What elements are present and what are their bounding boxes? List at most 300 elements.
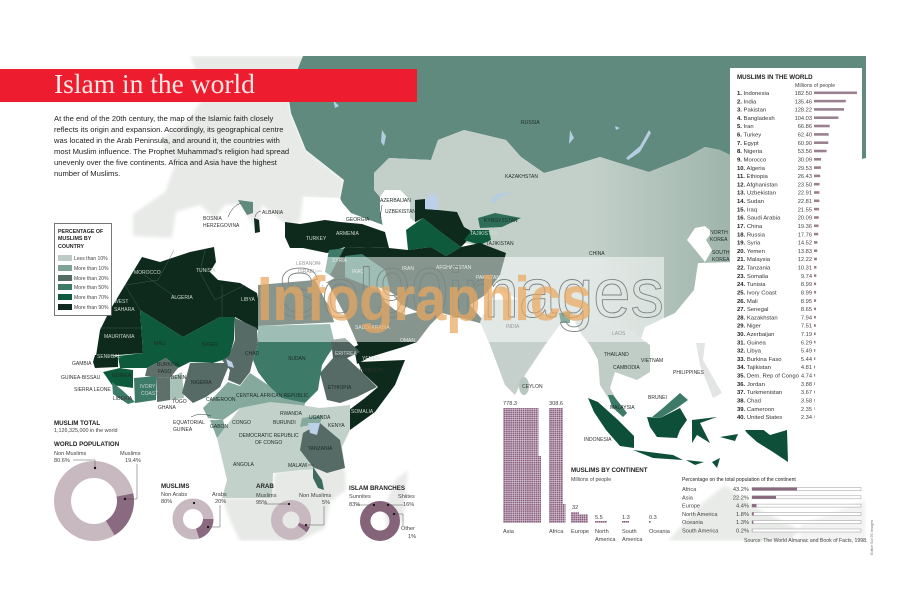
ranked country names: 14. Sudan [737, 199, 764, 205]
map country labels: KOREA [710, 237, 728, 243]
intro text: reflects its origin and expansion. Accordingly, its geographical centre [54, 125, 283, 134]
map country labels: IRAN [402, 266, 414, 272]
map country labels: UGANDA [309, 415, 331, 421]
countries: turkmenistan [406, 218, 461, 256]
values in millions: 104.03 [795, 116, 812, 122]
legend: percentage of muslims by country: PERCENTAGE OF [58, 229, 104, 235]
intro text: most Muslim influence. The Prophet Muhammad's religion had spread [54, 147, 289, 156]
countries: maghreb and mauritania [96, 247, 262, 356]
map country labels: RWANDA [280, 411, 303, 417]
map country labels: KOREA [712, 257, 730, 263]
legend: percentage of muslims by country: MUSLIMS BY [58, 236, 92, 242]
ranked country names: 1. Indonesia [737, 91, 770, 97]
ranked country names: 37. Turkmenistan [737, 390, 782, 396]
ranked country names: 12. Afghanistan [737, 182, 778, 188]
intro text: number of Muslims. [54, 169, 120, 178]
donut: muslims arab share: 20% [215, 499, 226, 505]
country: malawi [313, 467, 324, 490]
chart heading: MUSLIMS BY CONTINENT [571, 467, 648, 474]
country: lake victoria [308, 423, 320, 435]
ranked country names: 18. Russia [737, 232, 766, 238]
map country labels: ANGOLA [233, 462, 255, 468]
ranked country names: 3. Pakistan [737, 108, 766, 114]
values in millions: 3.58 [801, 398, 812, 404]
values in millions: 182.50 [795, 91, 812, 97]
donut: muslims arab share [161, 483, 227, 534]
map country labels: CONGO [232, 420, 251, 426]
donut: muslims arab share: MUSLIMS [161, 483, 190, 490]
countries: southeast asia mainland [575, 322, 650, 412]
ranked country names: 19. Syria [737, 241, 761, 247]
continent labels: South [622, 529, 637, 535]
map country labels: DJIBOUTI [360, 368, 383, 374]
muslim total: 1,126,325,000 in the world [54, 428, 118, 434]
countries: uzbekistan [415, 199, 473, 247]
ranked country names: 23. Somalia [737, 274, 769, 280]
map country labels: MALI [154, 341, 166, 347]
donut: muslims arab share: Arabs [212, 492, 227, 498]
rows: North America [682, 512, 718, 518]
values in millions: 53.56 [798, 149, 812, 155]
values in millions: 8.95 [801, 299, 812, 305]
donut: islam branches: Other [401, 526, 415, 532]
donut: arab muslims share: Non Muslims [299, 493, 332, 499]
legend labels: More than 50% [74, 285, 109, 291]
ranked country names: 15. Iraq [737, 207, 757, 213]
map country labels: SOUTH [712, 250, 730, 256]
ranked country names: 40. United States [737, 415, 782, 421]
continent labels: Asia [503, 529, 515, 535]
country: philippines [696, 343, 722, 398]
ranked country names: 24. Tunisia [737, 282, 766, 288]
values in millions: 3.67 [801, 390, 812, 396]
map country labels: NORTH [710, 230, 728, 236]
country: aral sea [425, 193, 438, 210]
map country labels: BENIN [171, 375, 187, 381]
ranked country names: 27. Senegal [737, 307, 768, 313]
map country labels: GUINEA-BISSAU [61, 375, 101, 381]
land: southern africa [222, 468, 346, 541]
muslim total [54, 420, 118, 434]
chart: percentage on the total population of the continent: Percentage on the total population of the continent [682, 477, 796, 483]
country: gabon [210, 420, 227, 438]
ranked country names: 6. Turkey [737, 133, 761, 139]
ranked country names: 38. Chad [737, 398, 761, 404]
map country labels: OF CONGO [255, 440, 282, 446]
map country labels: SAUDI ARABIA [355, 325, 390, 331]
ranked country names: 11. Ethiopia [737, 174, 769, 180]
donut: world population: Non Muslims [54, 451, 87, 457]
ranked country names: 2. India [737, 99, 757, 105]
values in millions: 19.36 [798, 224, 812, 230]
map country labels: CEYLON [522, 384, 543, 390]
map country labels: BOSNIA [203, 216, 223, 222]
chart: muslims by continent dot bars [503, 401, 671, 543]
country: chad [222, 318, 258, 385]
intro text: unevenly over the five continents. Africa and Asia have the highest [54, 158, 278, 167]
values in millions: 7.94 [801, 315, 812, 321]
map country labels: NIGER [202, 342, 218, 348]
ranked country names: 32. Libya [737, 349, 762, 355]
rows: 1.8% [736, 512, 749, 518]
ranked country names: 31. Guinea [737, 340, 767, 346]
ranked country names: 4. Bangladesh [737, 116, 775, 122]
ranked country names: 28. Kazakhstan [737, 315, 778, 321]
donut: islam branches: Shiites [398, 494, 415, 500]
map country labels: TANZANIA [308, 446, 333, 452]
country: syria [325, 247, 356, 278]
donut: arab muslims share: 95% [256, 500, 267, 506]
values in millions: 23.50 [798, 182, 812, 188]
legend labels [74, 256, 109, 311]
intro text: was located in the Arab Peninsula, and around it, the countries with [53, 136, 280, 145]
values in millions: 4.74 [801, 374, 812, 380]
country: uganda [300, 415, 323, 427]
lake: balkhash [491, 192, 513, 204]
ranked country names: 9. Morocco [737, 158, 767, 164]
map country labels: UZBEKISTAN [385, 209, 416, 215]
map country labels: MALAYSIA [610, 405, 635, 411]
country: ghana [157, 377, 170, 402]
donut: arab muslims share [256, 483, 332, 538]
map country labels: PAKISTAN [476, 275, 500, 281]
country: turkey and caucasus [285, 220, 389, 253]
bar values: 778.3 [503, 401, 517, 407]
map country labels: MALAWI [288, 463, 308, 469]
bars [814, 92, 857, 418]
map country labels: CHAD [245, 351, 260, 357]
map country labels: EQUATORIAL [173, 420, 205, 426]
values in millions: 66.86 [798, 124, 812, 130]
map country labels: LEBANON [296, 261, 320, 267]
ranked country names: 17. China [737, 224, 763, 230]
ranked country names [737, 91, 800, 421]
values in millions: 128.22 [795, 108, 812, 114]
map country labels: AZERBAIJAN [380, 198, 411, 204]
ranked country names: 16. Saudi Arabia [737, 216, 781, 222]
sea: red sea [322, 283, 358, 348]
ranked country names: 35. Dem. Rep of Congo [737, 374, 800, 380]
values in millions: 8.99 [801, 282, 812, 288]
map country labels: YEMEN [362, 356, 380, 362]
country: lake chad [226, 359, 234, 368]
values in millions: 8.65 [801, 307, 812, 313]
ranked country names: 22. Tanzania [737, 266, 771, 272]
donut: islam branches [349, 485, 416, 540]
map country labels: AFGHANISTAN [436, 265, 472, 271]
continent labels: Europe [571, 529, 589, 535]
legend labels: Less than 10% [74, 256, 108, 262]
map country labels: ISRAEL [298, 269, 316, 275]
rows: 43.2% [733, 487, 749, 493]
map country labels: ERITREA [335, 351, 357, 357]
map country labels: RUSSIA [521, 120, 540, 126]
values in millions: 14.52 [798, 241, 812, 247]
country: yemen [353, 342, 417, 364]
country: ivory coast [134, 376, 157, 403]
source: Source: The World Almanac and Book of Facts, 1998. [744, 538, 868, 544]
values in millions: 135.46 [795, 99, 812, 105]
rows: 4.4% [736, 504, 749, 510]
ranked country names: 30. Azerbaijan [737, 332, 774, 338]
country: nigeria [182, 363, 230, 403]
values in millions: 7.51 [801, 324, 812, 330]
watermark: Infographics: Infographics [257, 265, 592, 334]
values in millions: 7.19 [801, 332, 812, 338]
values in millions: 20.09 [798, 216, 812, 222]
countries: india [480, 298, 565, 395]
ranked country names: 13. Uzbekistan [737, 191, 776, 197]
continent labels: Africa [549, 529, 564, 535]
donut: world population: 19.4% [125, 458, 141, 464]
map country labels: CENTRAL AFRICAN REPUBLIC [236, 393, 309, 399]
watermark panel [258, 257, 664, 342]
ranked country names: 10. Algeria [737, 166, 766, 172]
country: malaysia [608, 393, 688, 418]
land: europe [133, 56, 344, 238]
legend labels: More than 20% [74, 276, 109, 282]
country: guinea [103, 368, 133, 388]
country: tajikistan [464, 230, 491, 245]
values in millions: 21.55 [798, 207, 812, 213]
bars: dot grids [503, 408, 651, 523]
bar values: 1.3 [622, 515, 630, 521]
bar values: 0.3 [649, 515, 657, 521]
map country labels: INDONESIA [584, 437, 612, 443]
map country labels: PHILIPPINES [673, 370, 705, 376]
donut: islam branches: ISLAM BRANCHES [349, 485, 405, 492]
map country labels: HERZEGOVINA [203, 223, 240, 229]
intro text: At the end of the 20th century, the map of the Islamic faith closely [54, 114, 274, 123]
map country labels: SENEGAL [97, 354, 121, 360]
lake: baikal and others [333, 100, 651, 160]
countries: cameroon and central african republic [203, 373, 305, 420]
map country labels: LIBERIA [113, 396, 133, 402]
bar values: 308.6 [549, 401, 563, 407]
countries: arabian peninsula [322, 275, 430, 342]
ranked country names: 33. Burkina Faso [737, 357, 782, 363]
country: ethiopia [320, 358, 377, 403]
countries: mali and niger [118, 310, 235, 368]
map country labels: SAHARA [114, 307, 135, 313]
countries: iran, afghanistan, pakistan [330, 243, 506, 325]
map country labels: ALBANIA [262, 210, 284, 216]
map country labels: TOGO [172, 399, 187, 405]
map country labels: TAJIKISTAN [470, 231, 498, 237]
legend: percentage of muslims by country: COUNTRY [58, 244, 84, 250]
chart heading: Millions of people [571, 477, 611, 483]
map country labels: CAMEROON [206, 397, 236, 403]
rows: 1.3% [736, 520, 749, 526]
bar values: 5.5 [595, 515, 603, 521]
country: bosnia [238, 200, 253, 215]
fills [752, 488, 797, 532]
map country labels: GUINEA [112, 373, 132, 379]
values in millions: 3.88 [801, 382, 812, 388]
donut: islam branches: 1% [408, 534, 416, 540]
map country labels: KAZAKHSTAN [505, 174, 538, 180]
panel: muslims in the world: MUSLIMS IN THE WORLD [737, 74, 813, 81]
donut: muslims arab share: Non Arabs [161, 492, 187, 498]
tracks [752, 488, 861, 532]
watermark: Sol90images: Sol90images [277, 254, 664, 332]
values in millions: 29.53 [798, 166, 812, 172]
rows: 0.2% [736, 528, 749, 534]
map country labels [61, 120, 730, 469]
map country labels: CAMBODIA [613, 365, 640, 371]
country: tanzania [300, 423, 345, 473]
rows: Africa [682, 487, 697, 493]
donut: islam branches: 83% [349, 502, 360, 508]
continent labels: America [595, 537, 616, 543]
values in millions: 13.83 [798, 249, 812, 255]
world map [93, 56, 866, 541]
countries: kazakhstan, china, mongolia, korea [374, 130, 735, 345]
donut: arab muslims share: 5% [322, 500, 330, 506]
ranked country names: 39. Cameroon [737, 407, 774, 413]
rows [682, 487, 749, 534]
countries: sierra leone and liberia [112, 382, 135, 404]
map country labels: CHINA [589, 251, 605, 257]
country: caspian sea [380, 190, 410, 225]
ranked country names: 29. Niger [737, 324, 761, 330]
donut: world population: 80.6% [54, 458, 70, 464]
country: eritrea [331, 338, 360, 358]
map country labels: IVORY [140, 384, 156, 390]
continent labels: America [622, 537, 643, 543]
country: kyrgyzstan [478, 213, 521, 228]
ranked country names: 36. Jordan [737, 382, 765, 388]
values in millions: 30.09 [798, 158, 812, 164]
bar values: 32 [572, 505, 578, 511]
country: albania [254, 218, 260, 233]
values in millions: 26.43 [798, 174, 812, 180]
map country labels: GUINEA [173, 427, 193, 433]
chart: percentage on the total population of the continent [682, 477, 861, 534]
ranked country names: 8. Nigeria [737, 149, 763, 155]
ranked country names: 20. Yemen [737, 249, 765, 255]
map country labels: ARMENIA [336, 231, 359, 237]
map country labels: BRUNEI [648, 395, 667, 401]
values in millions: 5.49 [801, 349, 812, 355]
map country labels: BURKINA [157, 362, 180, 368]
map country labels: OMAN [400, 338, 415, 344]
country: indonesia [588, 398, 788, 468]
map country labels: GEORGIA [346, 217, 370, 223]
donut: arab muslims share: Muslims [256, 493, 277, 499]
legend labels: More than 90% [74, 305, 109, 311]
values in millions: 2.35 [801, 407, 812, 413]
land: madagascar and australia [384, 470, 866, 541]
map country labels: BURUNDI [273, 420, 296, 426]
continent labels [503, 529, 671, 543]
legend: percentage of muslims by country [54, 224, 112, 316]
donut: world population: Muslims [120, 451, 141, 457]
ranked country names: 26. Mali [737, 299, 758, 305]
country: bangladesh [559, 312, 570, 323]
intro text [53, 114, 289, 178]
country: russia [288, 56, 866, 225]
map country labels: SYRIA [332, 258, 348, 264]
country: senegal and gambia [93, 355, 118, 368]
map country labels: GABON [210, 424, 228, 430]
donut: islam branches: Sunnites [349, 494, 371, 500]
values in millions: 22.81 [798, 199, 812, 205]
legend labels: More than 10% [74, 266, 109, 272]
map country labels: INDIA [506, 324, 520, 330]
map country labels: ETHIOPIA [328, 385, 352, 391]
map country labels: SOMALIA [351, 409, 374, 415]
continent labels: Oceania [649, 529, 671, 535]
ranked country names: 21. Malaysia [737, 257, 771, 263]
map country labels: TAJIKISTAN [486, 241, 514, 247]
values in millions [795, 91, 812, 421]
map country labels: KYRGYZSTAN [484, 218, 518, 224]
country: egypt [258, 280, 340, 326]
map country labels: TURKEY [306, 236, 327, 242]
continent labels: North [595, 529, 609, 535]
values in millions: 12.22 [798, 257, 812, 263]
rows: Oceania [682, 520, 704, 526]
map country labels: NIGERIA [191, 380, 212, 386]
map country labels: TUNISIA [196, 268, 216, 274]
credit: Editor Sol 90 Images [870, 520, 874, 555]
map country labels: SUDAN [288, 356, 306, 362]
values in millions: 17.76 [798, 232, 812, 238]
donut: arab muslims share: ARAB [256, 483, 274, 490]
panel: muslims in the world [730, 68, 862, 430]
map country labels: LAOS [612, 331, 626, 337]
chart heading [571, 467, 648, 483]
donut: world population: WORLD POPULATION [54, 441, 120, 448]
sea: bohai [687, 226, 712, 262]
map country labels: COAST [141, 391, 158, 397]
countries: togo and benin [170, 372, 184, 400]
map country labels: IRAQ [352, 269, 364, 275]
panel: muslims in the world: Millions of people [795, 83, 835, 89]
country: burkina faso [145, 358, 178, 378]
bar values [503, 401, 657, 521]
values in millions: 2.34 [801, 415, 812, 421]
title banner: Islam in the world [54, 68, 255, 99]
muslim total: MUSLIM TOTAL [54, 420, 100, 427]
map country labels: KENYA [328, 423, 345, 429]
map country labels: GHANA [158, 405, 176, 411]
legend labels: More than 70% [74, 295, 109, 301]
values in millions: 6.29 [801, 340, 812, 346]
map country labels: MOROCCO [134, 270, 161, 276]
values in millions: 8.99 [801, 290, 812, 296]
country: ceylon [519, 377, 529, 395]
country: somalia and djibouti [349, 360, 405, 430]
map country labels: VIETNAM [641, 358, 663, 364]
rows: Europe [682, 504, 700, 510]
legend swatches [58, 255, 72, 310]
map country labels: SIERRA LEONE [74, 387, 111, 393]
donut: islam branches: 16% [403, 502, 414, 508]
sea: persian gulf [378, 287, 418, 315]
map country labels: DEMOCRATIC REPUBLIC [239, 433, 299, 439]
values in millions: 9.74 [801, 274, 812, 280]
donut: world population [54, 441, 141, 538]
values in millions: 22.91 [798, 191, 812, 197]
values in millions: 62.40 [798, 133, 812, 139]
map country labels: ALGERIA [171, 295, 193, 301]
map country labels: WEST [114, 299, 128, 305]
countries: iraq [345, 254, 390, 292]
rows: Asia [682, 495, 694, 501]
donut: muslims arab share: 80% [161, 499, 172, 505]
